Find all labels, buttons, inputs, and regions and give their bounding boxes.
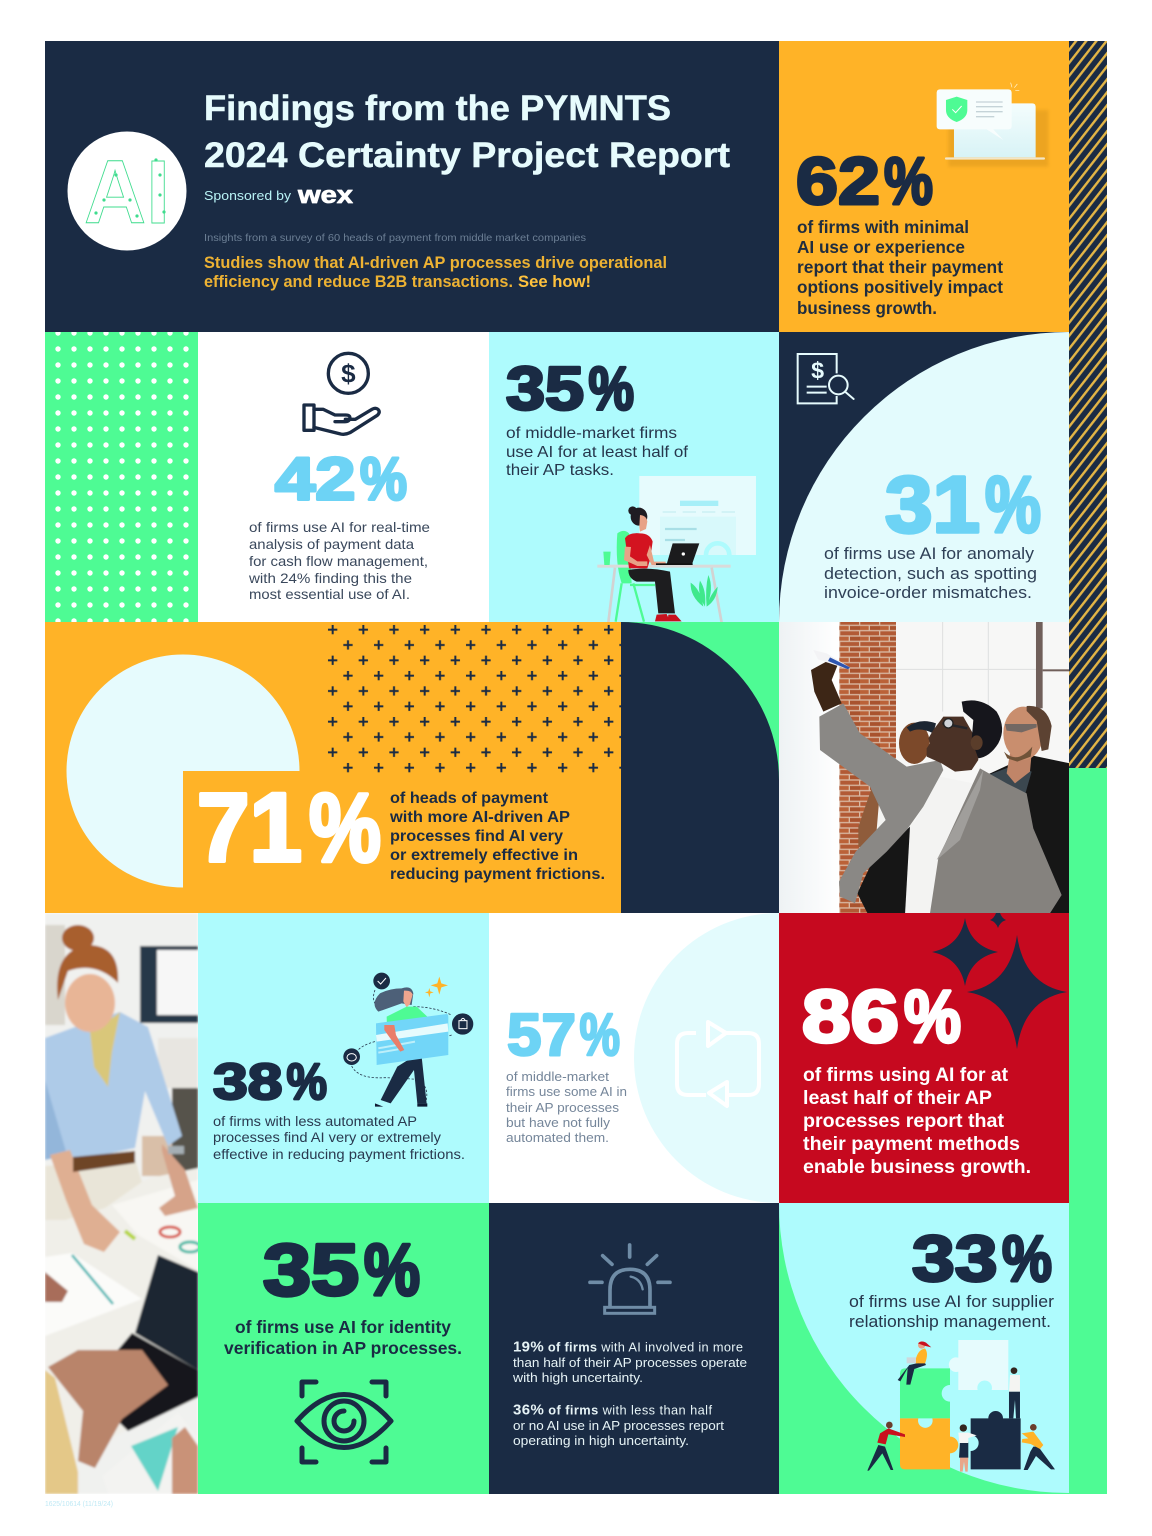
- woman centre: [960, 1457, 968, 1472]
- stat description: [849, 1293, 1055, 1331]
- stat description: or extremely effective in: [390, 847, 578, 864]
- person pushing left: [867, 1445, 893, 1471]
- intro text: See how!: [518, 273, 591, 291]
- icon: laptop with shield message: [937, 83, 1048, 167]
- stat description: most essential use of AI.: [249, 586, 410, 602]
- stat description: business growth.: [797, 298, 937, 318]
- stat description: [824, 545, 1037, 602]
- stat: 86%: %: [904, 975, 961, 1058]
- stat description: enable business growth.: [803, 1156, 1031, 1178]
- stat description: their payment methods: [803, 1133, 1020, 1155]
- stat description: [224, 1317, 462, 1358]
- stat description: report that their payment: [797, 257, 1003, 277]
- icon: alarm siren: [590, 1245, 670, 1313]
- stat description: of firms use AI for identity: [235, 1317, 451, 1337]
- head: [65, 974, 115, 1032]
- stat: 31%: [885, 460, 1041, 549]
- stat: 42%: 42: [275, 446, 356, 512]
- stat description: firms use some AI in: [506, 1085, 627, 1099]
- stat: 71%: %: [309, 773, 381, 882]
- chart: three-quarter pie: [67, 654, 300, 888]
- laptop: [135, 1255, 198, 1370]
- stat: 35%: 35: [506, 354, 584, 422]
- main paper: [45, 1253, 142, 1336]
- text: 36 percent: [513, 1402, 724, 1448]
- stat: 71%: 71: [197, 773, 302, 882]
- panel: 38 percent: [198, 913, 489, 1203]
- stat description: analysis of payment data: [249, 536, 414, 552]
- stat: 71%: [197, 773, 381, 882]
- photo: team at whiteboard: [779, 622, 1070, 915]
- text: 19 percent: 19% of firms with AI involved in more: [513, 1338, 743, 1356]
- stat description: processes find AI very: [390, 828, 563, 845]
- chart sheet: [112, 1180, 198, 1270]
- icon: AI circuit badge: [68, 132, 186, 250]
- panel: header: [45, 41, 779, 332]
- stat description: of firms use AI for real-time: [249, 519, 430, 535]
- panel: 62 percent: [779, 41, 1069, 332]
- icon: document with magnifier: $: [811, 357, 824, 383]
- panel: 33 percent: [779, 1203, 1069, 1494]
- title: [204, 89, 730, 175]
- lower paper: [102, 1412, 198, 1494]
- illustration: woman carrying payment card: [343, 973, 473, 1107]
- stat description: of heads of payment: [390, 790, 549, 807]
- stat: 57%: %: [580, 1002, 620, 1068]
- stat: 42%: [275, 446, 407, 512]
- shirt: [45, 1012, 182, 1161]
- panel: 71 percent: [45, 622, 621, 913]
- stat description: their AP tasks.: [506, 462, 614, 479]
- icon: hand with dollar coin: $: [341, 359, 356, 389]
- illustration: woman at desk: [597, 476, 756, 623]
- woman behind: [876, 805, 886, 830]
- stat: 31%: 31: [885, 460, 980, 549]
- stat description: [506, 1070, 627, 1145]
- stat description: but have not fully: [506, 1116, 611, 1130]
- icon: hand with dollar coin: [304, 353, 379, 434]
- central man head: [927, 717, 978, 772]
- jacket lining: [857, 827, 910, 915]
- icon: navy stars: [932, 905, 1067, 1049]
- survey note: Insights from a survey of 60 heads of payment from middle market companies: [204, 232, 586, 244]
- footnote: document code: 1625/10614 (11/19/24): [45, 1501, 113, 1508]
- stat: 31%: %: [985, 460, 1041, 549]
- stat: 38%: [213, 1053, 327, 1110]
- illustration: team with puzzle pieces: [867, 1340, 1055, 1472]
- panel: 42 percent: [198, 332, 489, 622]
- panel: 35 percent identity: [198, 1203, 489, 1494]
- stat: 33%: 33: [912, 1222, 998, 1295]
- stat description: for cash flow management,: [249, 553, 428, 569]
- table: [162, 1166, 198, 1180]
- pattern: plus signs: [325, 622, 621, 776]
- pattern: white dots: [50, 332, 195, 622]
- stat description: AI use or experience: [797, 237, 965, 257]
- panel: hatched strip: [1069, 41, 1107, 768]
- shape: half circle: [634, 913, 779, 1203]
- stat: 86%: [802, 975, 961, 1058]
- stat description: invoice-order mismatches.: [824, 584, 1032, 602]
- person on top left: [898, 1362, 926, 1385]
- stat description: least half of their AP: [803, 1087, 992, 1109]
- panel: 57 percent: [489, 913, 779, 1203]
- stat description: use AI for at least half of: [506, 444, 689, 461]
- man right jacket: [983, 755, 1070, 913]
- stat description: processes report that: [803, 1110, 1005, 1132]
- stat description: options positively impact: [797, 277, 1003, 297]
- belt: [73, 1151, 135, 1172]
- intro text: efficiency and reduce B2B transactions.: [204, 273, 513, 291]
- stat description: [248, 519, 430, 602]
- stat: 86%: 86: [802, 975, 899, 1058]
- photo: woman reviewing charts: [45, 913, 200, 1494]
- title: 2024 Certainty Project Report: [204, 136, 730, 175]
- stat: 57%: 57: [507, 1002, 576, 1068]
- typing hands: [48, 1350, 168, 1468]
- stat: 35%: 35: [263, 1230, 359, 1311]
- stat description: verification in AP processes.: [224, 1338, 462, 1358]
- panel: uncertainty: [489, 1203, 779, 1494]
- person pushing right: [1024, 1447, 1055, 1470]
- shape: green corner: [621, 622, 779, 780]
- central man tee: [905, 777, 973, 913]
- stat: 35%: [506, 354, 634, 422]
- panel: 35 percent middle-market: [489, 332, 779, 623]
- shape: quarter circle: [779, 332, 1069, 622]
- icon: document with magnifier: [798, 354, 854, 403]
- right jacket panel: [930, 768, 1062, 913]
- stat description: relationship management.: [849, 1313, 1051, 1331]
- blonde hair: [45, 1370, 78, 1494]
- stat description: of middle-market: [506, 1070, 610, 1084]
- raised hand: [811, 660, 842, 712]
- stat description: of firms use AI for anomaly: [824, 545, 1035, 563]
- stat description: of firms using AI for at: [803, 1064, 1008, 1086]
- stat description: [797, 217, 1003, 318]
- sponsor line: Sponsored by: [204, 188, 292, 203]
- trousers: [45, 1159, 142, 1220]
- stat: 62%: [796, 144, 933, 219]
- title: Findings from the PYMNTS: [204, 89, 671, 128]
- panel: 31 percent: [779, 332, 1069, 622]
- stat description: processes find AI very or extremely: [213, 1130, 441, 1145]
- icon: refresh arrows: [677, 1022, 759, 1106]
- stat: 35%: [263, 1230, 420, 1311]
- stat description: detection, such as spotting: [824, 565, 1037, 583]
- intro text: [204, 254, 667, 291]
- stat: 35%: %: [588, 354, 634, 422]
- stat description: [506, 425, 689, 479]
- stat: 42%: %: [360, 446, 407, 512]
- intro text: Studies show that AI-driven AP processes drive operational: [204, 254, 667, 272]
- stat: 33%: [912, 1222, 1052, 1295]
- person on right piece: [1009, 1392, 1020, 1418]
- stat description: effective in reducing payment frictions.: [213, 1147, 465, 1162]
- panel: green strip: [1069, 768, 1107, 1494]
- text: 36 percent: 36% of firms with less than half: [513, 1402, 712, 1418]
- left jacket panel and sleeve: [819, 703, 943, 903]
- stat description: [803, 1064, 1031, 1178]
- stat: 38%: 38: [213, 1053, 282, 1110]
- stat: 57%: [507, 1002, 620, 1068]
- sponsor line: wex: [297, 182, 354, 209]
- shape: quarter circle: [779, 1203, 1069, 1493]
- panel: 86 percent: [779, 905, 1069, 1203]
- arms: [50, 1150, 120, 1252]
- stat description: of firms use AI for supplier: [849, 1293, 1055, 1311]
- stat description: with more AI-driven AP: [389, 809, 570, 826]
- stat description: of firms with less automated AP: [213, 1114, 417, 1129]
- stat description: with 24% finding this the: [248, 570, 412, 586]
- text: 19 percent: with high uncertainty.: [512, 1370, 643, 1385]
- stat description: reducing payment frictions.: [390, 866, 605, 883]
- text: 19 percent: than half of their AP processes operate: [513, 1355, 747, 1370]
- panel: navy and green curve: [621, 622, 779, 913]
- panel: dotted green: [45, 332, 198, 622]
- stat description: of firms with minimal: [797, 217, 969, 237]
- stat: 62%: 62: [796, 144, 880, 219]
- stat description: of middle-market firms: [506, 425, 677, 442]
- text: 36 percent: operating in high uncertainty.: [513, 1433, 689, 1448]
- stat: 35%: %: [364, 1230, 420, 1311]
- stat: 62%: %: [884, 144, 933, 219]
- stat description: automated them.: [506, 1131, 609, 1145]
- stat: 33%: %: [1002, 1222, 1052, 1295]
- text: 19 percent: [512, 1338, 747, 1385]
- scarf: [89, 1012, 121, 1087]
- sponsor line: [204, 182, 354, 209]
- stat description: their AP processes: [506, 1101, 619, 1115]
- stat: 38%: %: [286, 1053, 327, 1110]
- icon: AI circuit badge: AI: [84, 143, 170, 243]
- stat description: [213, 1114, 465, 1162]
- stat description: [389, 790, 605, 883]
- icon: eye scan: [297, 1382, 391, 1462]
- text: 36 percent: or no AI use in AP processes report: [513, 1418, 724, 1433]
